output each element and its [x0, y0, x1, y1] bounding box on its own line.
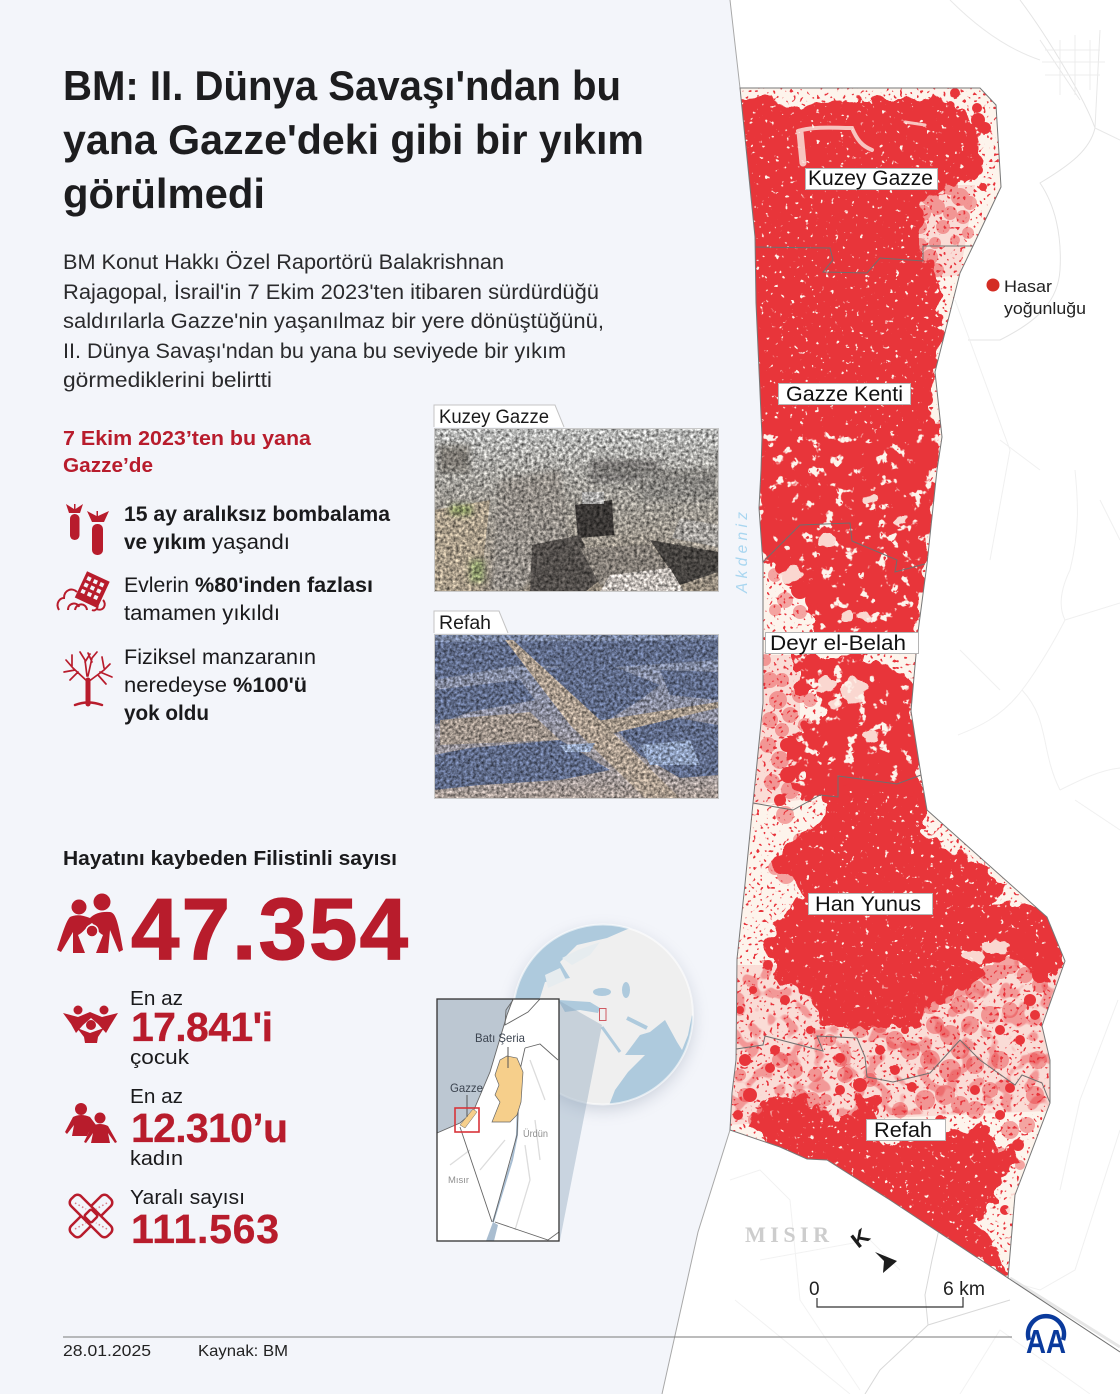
intro text: görmediklerini belirtti	[63, 369, 272, 392]
label: Refah: Refah	[874, 1119, 932, 1142]
text: homes: %80'inden fazlası	[195, 574, 373, 597]
globe	[510, 924, 699, 1116]
intro text	[63, 251, 604, 392]
southern border line	[1008, 1278, 1120, 1352]
map background roads	[730, 0, 1120, 1394]
intro text: Rajagopal, İsrail'in 7 Ekim 2023'ten itibaren sürdürdüğü	[63, 281, 599, 304]
intro text: BM Konut Hakkı Özel Raportörü Balakrishnan	[63, 251, 504, 274]
stat: women	[130, 1086, 288, 1170]
text: landscape: yok oldu	[124, 702, 209, 725]
label: Deyr el-Belah: Deyr el-Belah	[770, 632, 906, 655]
label: Han Yunus: Han Yunus	[815, 893, 921, 916]
scale bar: 6 km	[943, 1279, 985, 1300]
scale bar: 0	[809, 1279, 820, 1300]
stat: children: çocuk	[130, 1047, 190, 1069]
strip outline	[730, 88, 1065, 1278]
text: homes: tamamen yıkıldı	[124, 602, 280, 625]
gaps in dense clusters	[779, 495, 1018, 1214]
photo tab: Refah	[439, 613, 491, 634]
Scandinavia and Europe land	[545, 942, 600, 988]
stat: children	[130, 988, 273, 1069]
dense damage north and south	[735, 96, 1066, 1280]
intro text: II. Dünya Savaşı'ndan bu yana bu seviyede bir yıkım	[63, 340, 566, 363]
locator inset map	[437, 999, 559, 1241]
label: Mısır on map: MISIR	[745, 1222, 830, 1247]
translucent blobs	[725, 960, 1070, 1120]
legend: damage density: Hasar	[1004, 277, 1052, 296]
icon: bandage	[68, 1193, 114, 1239]
photo tab: Kuzey Gazze	[439, 407, 549, 428]
footer date and source	[63, 1343, 288, 1360]
text: landscape: Fiziksel manzaranın	[124, 646, 316, 669]
text: bombardment	[124, 503, 390, 554]
icon: women	[65, 1103, 117, 1143]
title: yana Gazze'deki gibi bir yıkım	[63, 116, 644, 163]
stat: children: 17.841'i	[131, 1004, 273, 1050]
footer date and source: 28.01.2025	[63, 1343, 151, 1360]
heading: death toll: Hayatını kaybeden Filistinli sayısı	[63, 848, 397, 870]
gaps in north cluster	[798, 122, 925, 163]
text: bombardment: ve yıkım	[124, 531, 206, 554]
locator inset map: Mısır	[448, 1175, 469, 1186]
scale bar	[809, 1279, 985, 1307]
text: landscape	[124, 646, 316, 725]
pale wash in lighter zones	[725, 185, 1070, 1125]
text: landscape: neredeyse	[124, 674, 227, 697]
stat: wounded: 111.563	[131, 1206, 279, 1252]
governorate boundaries	[736, 246, 1050, 1103]
locator inset map: Gazze	[450, 1081, 483, 1095]
subheading: Gazze’de	[63, 455, 153, 477]
strip base	[730, 88, 1065, 1278]
icon: dead tree	[64, 652, 112, 705]
photo: Refah	[434, 611, 718, 799]
text: homes: Evlerin	[124, 574, 189, 597]
AA logo: AA	[1026, 1323, 1066, 1360]
north arrow: K	[847, 1224, 874, 1253]
locator inset map: Batı Şeria	[475, 1031, 525, 1045]
subheading: 7 Ekim 2023’ten bu yana	[63, 428, 312, 450]
photo tab	[434, 611, 508, 634]
icon: collapsed building	[58, 571, 110, 610]
subheading	[63, 428, 312, 477]
stat: women: En az	[130, 1086, 183, 1108]
legend: damage density: yoğunluğu	[1004, 299, 1086, 318]
text: bombardment: yaşandı	[212, 531, 290, 554]
north arrow	[847, 1224, 897, 1273]
stat: women: 12.310’u	[131, 1105, 288, 1151]
pale circles	[734, 179, 1048, 1170]
sea label: Akdeniz: Akdeniz	[734, 512, 751, 594]
locator inset map: Ürdün	[523, 1128, 548, 1140]
intro text: saldırılarla Gazze'nin yaşanılmaz bir yere dönüştüğünü,	[63, 310, 604, 333]
left panel	[0, 0, 763, 1394]
solid circles at dense edges	[733, 88, 1059, 1215]
stat: children: En az	[130, 988, 183, 1010]
text: bombardment: 15 ay aralıksız bombalama	[124, 503, 390, 526]
title	[63, 62, 644, 217]
footer date and source: Kaynak: BM	[198, 1343, 288, 1360]
damage layers	[725, 85, 1070, 1280]
fine speckle	[725, 85, 1070, 1280]
map: damage density in Gaza strip	[725, 85, 1070, 1280]
text: landscape: %100'ü	[233, 674, 307, 697]
icon: bombs	[66, 504, 109, 555]
icon: family	[57, 894, 123, 953]
photo image	[434, 428, 718, 592]
legend: damage density	[986, 277, 1086, 318]
dense patchy damage central	[755, 426, 940, 798]
stat: wounded: Yaralı sayısı	[130, 1187, 245, 1209]
title: görülmedi	[63, 170, 265, 217]
icon: children	[63, 1006, 118, 1043]
label: Gazze Kenti: Gazze Kenti	[786, 383, 903, 406]
label: Kuzey Gazze: Kuzey Gazze	[808, 167, 933, 190]
photo: Kuzey Gazze	[434, 405, 718, 592]
footer rule	[63, 1336, 1012, 1338]
coastline	[662, 0, 740, 1394]
locator cone	[558, 1000, 602, 1240]
stat: women: kadın	[130, 1148, 183, 1170]
number: total dead: 47.354	[131, 881, 408, 978]
text: homes	[124, 574, 373, 625]
photo image	[434, 634, 718, 799]
title: BM: II. Dünya Savaşı'ndan bu	[63, 62, 621, 109]
